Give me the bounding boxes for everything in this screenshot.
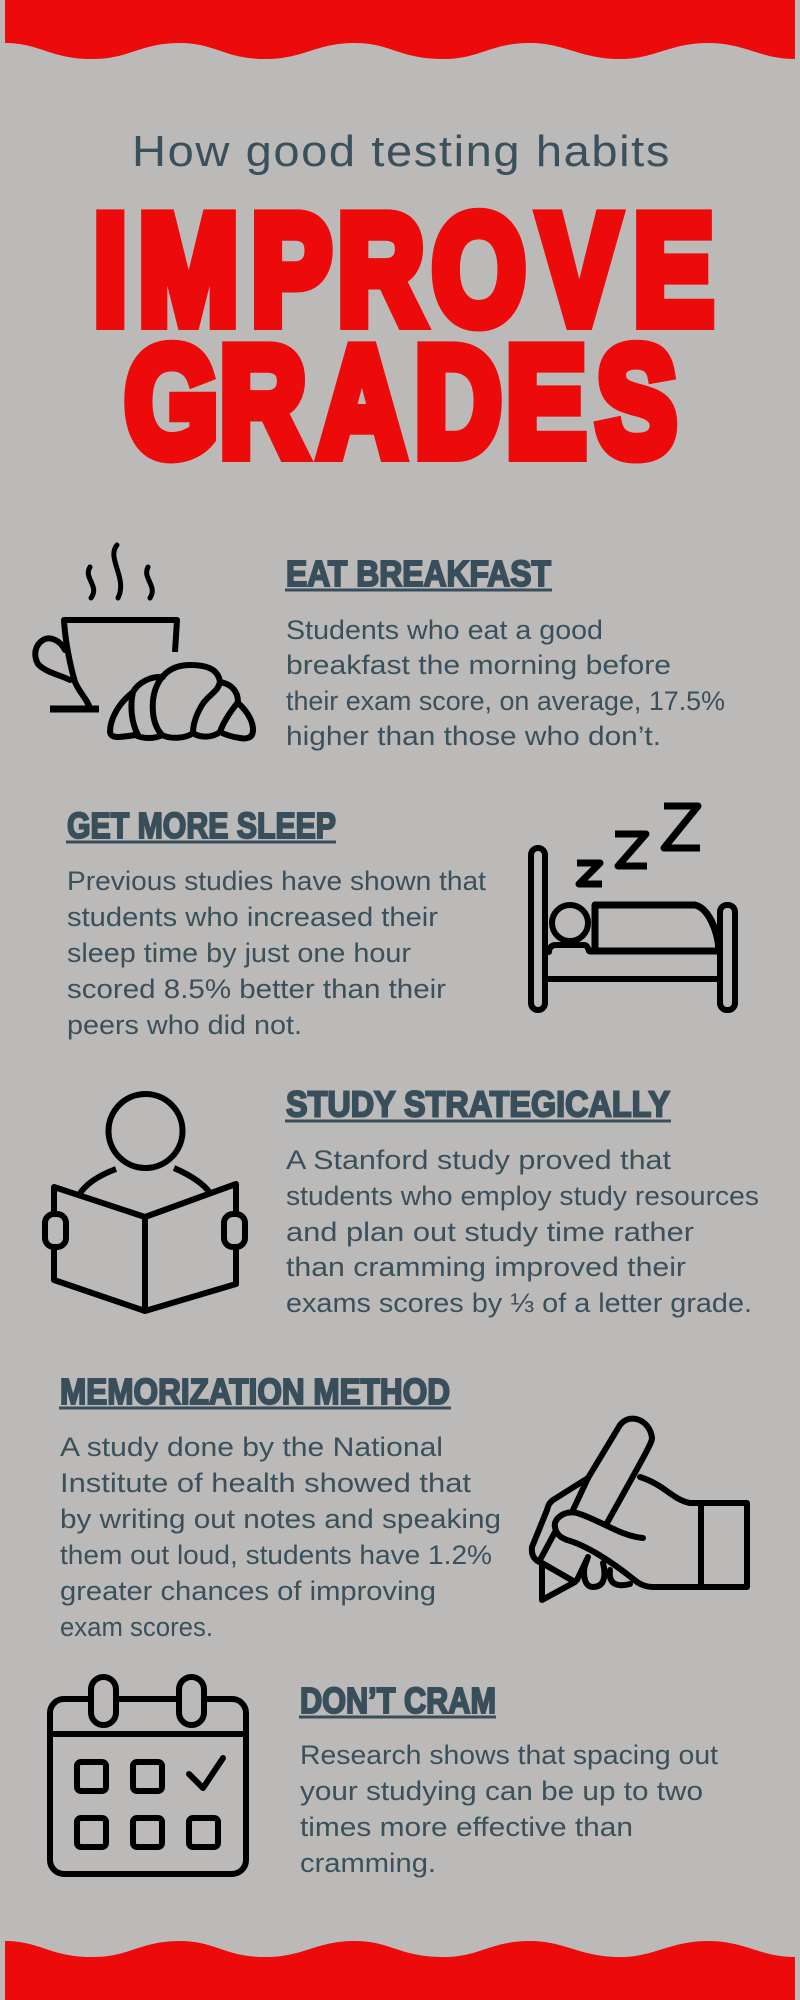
heading: don't cram: DON’T CRAM (300, 1680, 496, 1721)
text: memorization method: Institute of health showed that (60, 1468, 472, 1498)
text: don't cram: your studying can be up to two (300, 1776, 703, 1806)
text: eat breakfast (286, 615, 725, 751)
heading: memorization method: MEMORIZATION METHOD (60, 1371, 450, 1412)
text: don't cram: cramming. (300, 1848, 436, 1878)
text: get more sleep: Previous studies have shown that (67, 866, 487, 896)
text: don't cram: Research shows that spacing out (300, 1740, 719, 1770)
heading: get more sleep: GET MORE SLEEP (67, 805, 336, 846)
panel: eat breakfast (35, 545, 725, 751)
text: memorization method: them out loud, students have 1.2% (60, 1540, 492, 1570)
icon: calendar with check (50, 1677, 246, 1874)
icon: bed with sleeper (531, 806, 735, 1010)
icon: person reading (45, 1094, 245, 1311)
panel: study strategically (45, 1084, 759, 1318)
text: memorization method: A study done by the National (60, 1432, 443, 1462)
text: eat breakfast: breakfast the morning before (286, 650, 671, 680)
text: get more sleep: sleep time by just one hour (67, 938, 411, 968)
text: get more sleep (67, 866, 487, 1040)
heading: eat breakfast: EAT BREAKFAST (286, 553, 551, 594)
panel: get more sleep (66, 805, 735, 1040)
text: don't cram (300, 1740, 719, 1878)
text: memorization method: greater chances of improving (60, 1576, 436, 1606)
panel: don't cram (50, 1677, 719, 1878)
top red wave banner (5, 0, 795, 59)
text: study strategically: exams scores by ⅓ of a letter grade. (286, 1288, 752, 1318)
text: get more sleep: peers who did not. (67, 1010, 302, 1040)
title: subtitle line: How good testing habits (132, 127, 671, 176)
text: memorization method (60, 1432, 501, 1642)
text: eat breakfast: their exam score, on average, 17.5% (286, 686, 725, 716)
text: study strategically: than cramming improved their (286, 1252, 686, 1282)
text: memorization method: exam scores. (60, 1612, 213, 1642)
icon: coffee and croissant (35, 545, 253, 738)
icon: hand writing with pen (532, 1419, 747, 1600)
text: eat breakfast: higher than those who don’t. (286, 721, 661, 751)
text: study strategically: students who employ study resources (286, 1181, 759, 1211)
text: don't cram: times more effective than (300, 1812, 633, 1842)
text: study strategically (286, 1145, 759, 1318)
text: study strategically: and plan out study time rather (286, 1217, 694, 1247)
title: IMPROVE GRADES: IMPROVE (94, 184, 714, 357)
text: memorization method: by writing out notes and speaking (60, 1504, 501, 1534)
title: IMPROVE GRADES: GRADES (125, 316, 677, 489)
title: IMPROVE GRADES (94, 184, 714, 489)
text: get more sleep: students who increased their (67, 902, 438, 932)
text: study strategically: A Stanford study proved that (286, 1145, 672, 1175)
heading: study strategically: STUDY STRATEGICALLY (286, 1084, 670, 1124)
text: get more sleep: scored 8.5% better than their (67, 974, 446, 1004)
text: eat breakfast: Students who eat a good (286, 615, 603, 645)
panel: memorization method (59, 1371, 747, 1642)
bottom red wave banner (5, 1941, 795, 2000)
